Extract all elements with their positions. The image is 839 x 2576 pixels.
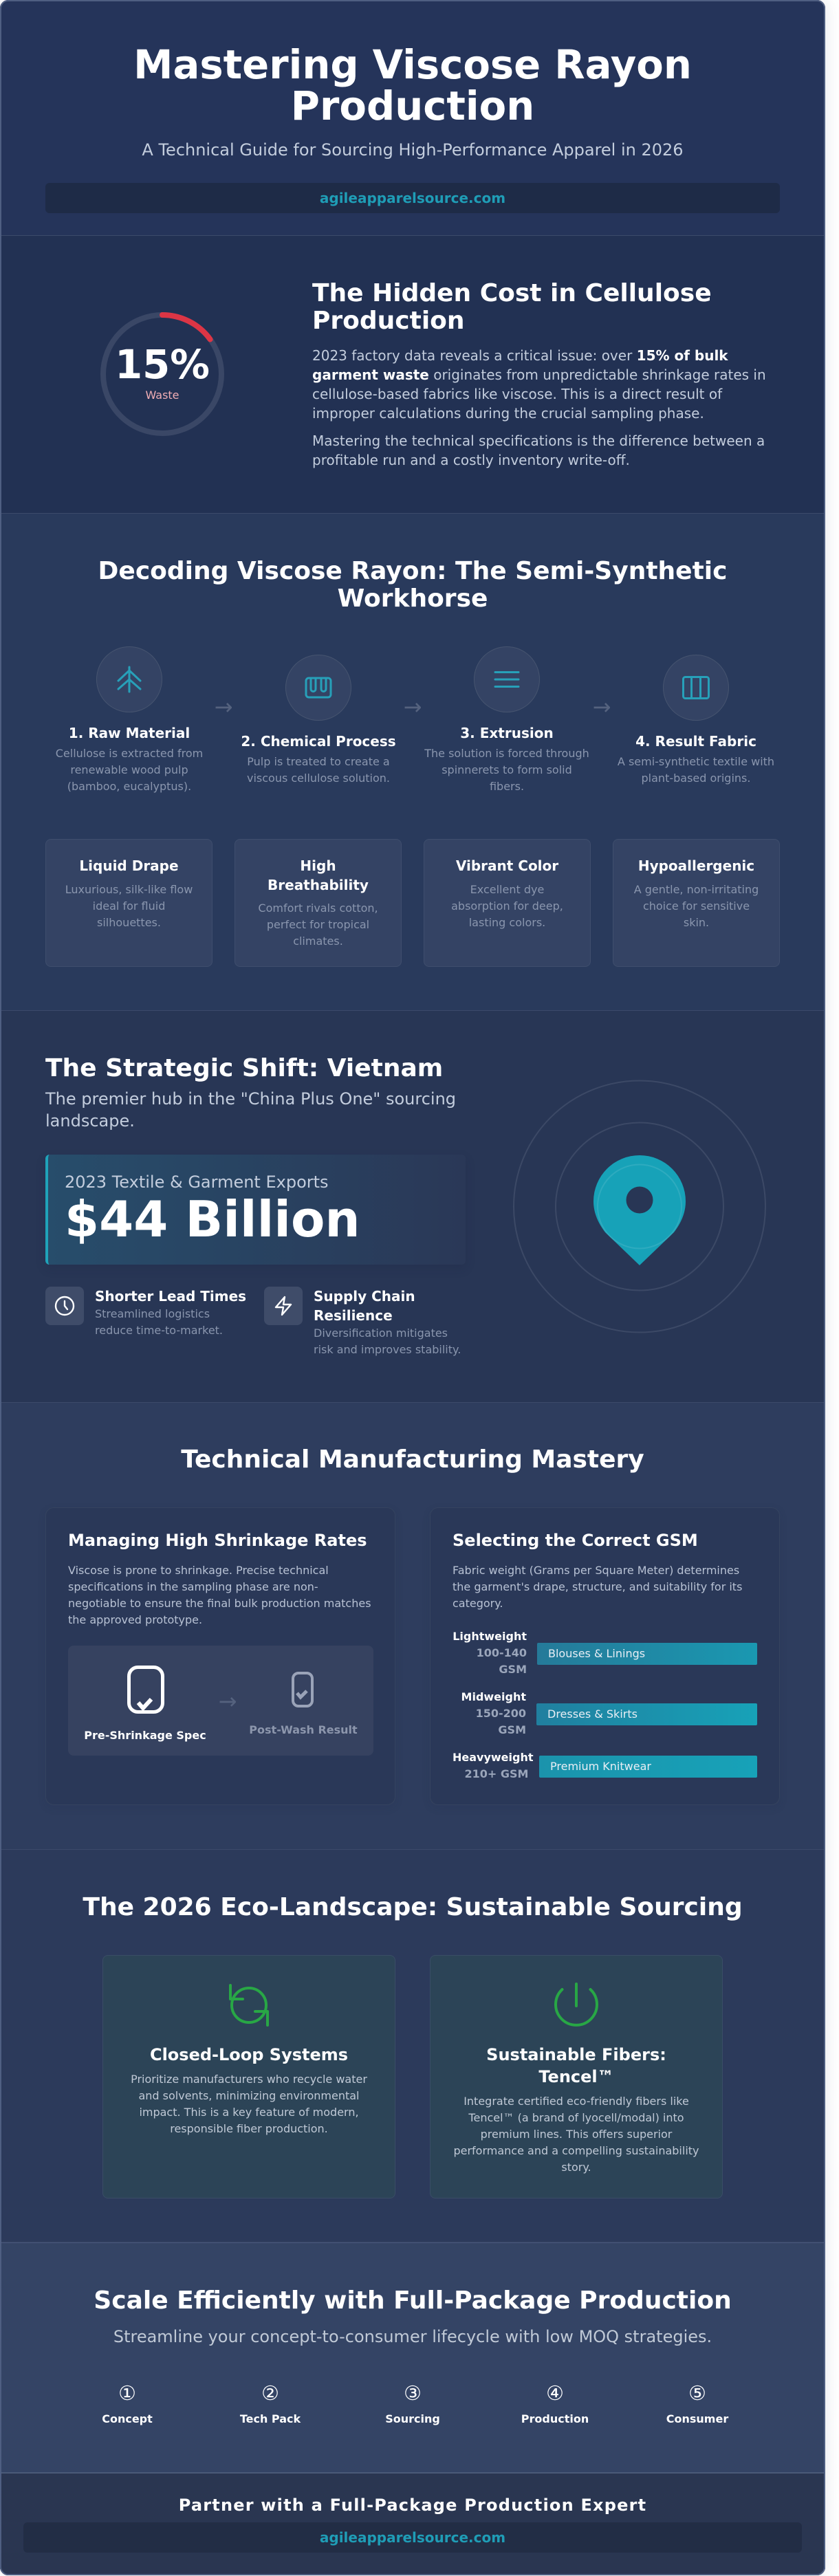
GSM label: lightweight: [453, 1630, 527, 1676]
card text: responsible fiber production.: [170, 2122, 328, 2135]
section: decoding viscose: [0, 514, 825, 1011]
benefit text: [314, 1327, 461, 1356]
step label: Sourcing: [385, 2412, 440, 2425]
feature text: Comfort rivals cotton,: [258, 902, 378, 915]
feature text: perfect for tropical: [267, 918, 369, 931]
heading: [98, 557, 727, 613]
body paragraph 1: [312, 347, 766, 422]
feature text: [451, 883, 563, 929]
benefit text: risk and improves stability.: [314, 1343, 461, 1356]
card title: [486, 2045, 666, 2086]
step 4 icon: fabric: [663, 655, 729, 721]
feature text: [258, 902, 378, 948]
step 1 icon: tree: [96, 646, 162, 712]
body paragraph 2: Mastering the technical specifications is the difference between a: [312, 433, 765, 449]
panel text: category.: [453, 1597, 503, 1610]
section: hidden cost: [0, 236, 825, 514]
benefit title: Shorter Lead Times: [95, 1288, 246, 1305]
step label: Tech Pack: [240, 2412, 301, 2425]
feature title: High: [300, 858, 336, 874]
donut chart: 15% waste: [100, 312, 224, 436]
heading: The 2026 Eco-Landscape: Sustainable Sourcing: [83, 1893, 743, 1921]
step: concept: ①: [118, 2381, 136, 2405]
stat label: waste: Waste: [145, 389, 179, 402]
card text: story.: [561, 2161, 591, 2174]
subheading: landscape.: [45, 1111, 135, 1131]
step 1 text: Cellulose is extracted from: [56, 747, 203, 760]
subheading: Streamline your concept-to-consumer lifecycle with low MOQ strategies.: [113, 2327, 712, 2346]
benefit title: [314, 1288, 415, 1324]
benefit title: Supply Chain: [314, 1288, 415, 1305]
step 2 title: 2. Chemical Process: [241, 733, 396, 750]
panel: shrinkage: [45, 1507, 395, 1805]
step 3 text: The solution is forced through: [424, 747, 589, 760]
subheading: The premier hub in the "China Plus One" sourcing: [45, 1089, 456, 1109]
feature card: vibrant color: [424, 839, 591, 967]
heading: The Hidden Cost in Cellulose: [312, 279, 712, 307]
body paragraph 1: garment waste originates from unpredictable shrinkage rates in: [312, 367, 766, 383]
website bar: [45, 183, 780, 213]
panel text: specifications in the sampling phase are non-: [68, 1580, 318, 1593]
panel text: the approved prototype.: [68, 1613, 202, 1626]
body paragraph 1: 2023 factory data reveals a critical issue: over 15% of bulk: [312, 347, 728, 364]
icon: clock: [45, 1287, 84, 1325]
feature card: liquid drape: [45, 839, 213, 967]
step label: Concept: [102, 2412, 153, 2425]
feature title: Hypoallergenic: [638, 858, 754, 874]
panel title: Selecting the Correct GSM: [453, 1531, 698, 1550]
GSM bar: lightweight: [537, 1643, 757, 1665]
panel: GSM: [430, 1507, 780, 1805]
step: sourcing: ③: [404, 2381, 422, 2405]
stat box: exports: [45, 1155, 466, 1265]
step: consumer: ⑤: [688, 2381, 706, 2405]
card text: Prioritize manufacturers who recycle water: [131, 2073, 367, 2086]
GSM label: midweight: Midweight: [461, 1690, 526, 1703]
feature text: ideal for fluid: [93, 899, 165, 913]
stat value: $44 Billion: [65, 1190, 360, 1248]
step 2 icon: vat: [285, 655, 351, 721]
feature text: Excellent dye: [470, 883, 544, 896]
section: eco landscape: [0, 1850, 825, 2242]
step 3 icon: lines: [474, 646, 540, 712]
heading: Production: [312, 307, 465, 335]
step 3 text: fibers.: [490, 780, 524, 793]
card text: Tencel™ (a brand of lyocell/modal) into: [468, 2111, 684, 2124]
heading: Decoding Viscose Rayon: The Semi-Synthetic: [98, 557, 727, 585]
feature text: skin.: [684, 916, 709, 929]
feature text: lasting colors.: [469, 916, 545, 929]
step 1 text: [56, 747, 203, 793]
website bar: [23, 2522, 802, 2553]
step: production: ④: [546, 2381, 564, 2405]
feature text: Luxurious, silk-like flow: [65, 883, 193, 896]
panel text: negotiable to ensure the final bulk production matches: [68, 1597, 371, 1610]
body paragraph 2: [312, 433, 765, 468]
heading: Scale Efficiently with Full-Package Production: [94, 2286, 732, 2315]
step 4 text: A semi-synthetic textile with: [618, 755, 774, 768]
GSM bar: midweight: Dresses & Skirts: [547, 1707, 638, 1721]
arrow 3: →: [593, 694, 611, 720]
step 3 title: 3. Extrusion: [460, 725, 554, 741]
feature text: climates.: [293, 935, 343, 948]
body paragraph 1: cellulose-based fabrics like viscose. This is a direct result of: [312, 386, 722, 402]
GSM bar: heavyweight: [539, 1756, 757, 1778]
feature text: [634, 883, 759, 929]
panel text: Viscose is prone to shrinkage. Precise technical: [68, 1564, 329, 1577]
feature title: Breathability: [268, 877, 369, 893]
benefit text: Diversification mitigates: [314, 1327, 448, 1340]
feature text: A gentle, non-irritating: [634, 883, 759, 896]
icon: power: [554, 1983, 598, 2027]
section: full package: [0, 2242, 825, 2472]
icon: post-wash garment: [292, 1672, 314, 1707]
card text: premium lines. This offers superior: [481, 2128, 672, 2141]
arrow 1: →: [215, 694, 232, 720]
card text: [453, 2095, 699, 2174]
benefit text: Streamlined logistics: [95, 1307, 210, 1320]
feature text: absorption for deep,: [451, 899, 563, 913]
GSM label: lightweight: GSM: [499, 1663, 527, 1676]
heading: The Strategic Shift: Vietnam: [45, 1054, 443, 1082]
feature text: silhouettes.: [97, 916, 161, 929]
step label: Production: [521, 2412, 589, 2425]
feature card: breathability: [235, 839, 402, 967]
feature card: hypoallergenic: [613, 839, 780, 967]
icon: bolt: [264, 1287, 303, 1325]
heading: [312, 279, 712, 335]
benefit text: reduce time-to-market.: [95, 1324, 223, 1337]
body paragraph 2: profitable run and a costly inventory write-off.: [312, 452, 630, 468]
GSM label: heavyweight: [453, 1751, 534, 1780]
card title: Closed-Loop Systems: [150, 2045, 348, 2064]
subheading: [45, 1089, 456, 1131]
panel text: Fabric weight (Grams per Square Meter) determines: [453, 1564, 739, 1577]
pre-shrinkage label: Pre-Shrinkage Spec: [84, 1729, 206, 1742]
benefit text: [95, 1307, 223, 1337]
GSM label: heavyweight: 210+ GSM: [464, 1767, 528, 1780]
feature text: choice for sensitive: [643, 899, 750, 913]
map graphic: rings and pin: [513, 1080, 766, 1333]
GSM bar: lightweight: Blouses & Linings: [548, 1647, 645, 1660]
website bar: agileapparelsource.com: [320, 190, 505, 206]
icon: pre-shrinkage garment: [127, 1666, 164, 1714]
title: Production: [291, 83, 534, 129]
GSM label: midweight: GSM: [498, 1723, 526, 1736]
GSM label: midweight: [461, 1690, 526, 1736]
card text: and solvents, minimizing environmental: [138, 2089, 359, 2102]
card text: [131, 2073, 367, 2135]
step 3 text: [424, 747, 589, 793]
title: [133, 42, 692, 129]
card text: performance and a compelling sustainability: [453, 2144, 699, 2157]
step 4 title: 4. Result Fabric: [635, 733, 756, 750]
footer: [0, 2472, 825, 2575]
step 2 text: Pulp is treated to create a: [247, 755, 390, 768]
benefit title: Resilience: [314, 1307, 393, 1324]
step 2 text: [247, 755, 390, 785]
section: technical mastery: [0, 1403, 825, 1850]
card title: Sustainable Fibers:: [486, 2045, 666, 2064]
eco card: closed loop: [102, 1955, 395, 2198]
GSM label: lightweight: Lightweight: [453, 1630, 527, 1643]
feature text: [65, 883, 193, 929]
GSM bar: midweight: [536, 1703, 757, 1725]
heading: Technical Manufacturing Mastery: [181, 1445, 644, 1474]
icon: recycle: [229, 1984, 269, 2027]
subtitle: A Technical Guide for Sourcing High-Performance Apparel in 2026: [142, 140, 684, 160]
feature title: Liquid Drape: [79, 858, 179, 874]
step 4 text: [618, 755, 774, 785]
footer call to action: Partner with a Full-Package Production Expert: [179, 2496, 646, 2515]
post-wash label: Post-Wash Result: [249, 1723, 358, 1736]
card title: Tencel™: [538, 2067, 614, 2086]
feature title: [268, 858, 369, 893]
step 3 text: spinnerets to form solid: [442, 763, 572, 776]
title: Mastering Viscose Rayon: [133, 42, 692, 88]
body paragraph 1: improper calculations during the crucial sampling phase.: [312, 405, 704, 422]
card text: impact. This is a key feature of modern,: [139, 2106, 359, 2119]
panel title: Managing High Shrinkage Rates: [68, 1531, 367, 1550]
section: vietnam: [0, 1011, 825, 1403]
arrow: →: [219, 1688, 237, 1714]
step 1 text: (bamboo, eucalyptus).: [67, 780, 191, 793]
step 1 text: renewable wood pulp: [70, 763, 188, 776]
stat: 15%: 15%: [115, 342, 210, 388]
GSM bar: heavyweight: Premium Knitwear: [550, 1760, 651, 1773]
GSM label: midweight: 150-200: [476, 1707, 526, 1720]
GSM label: heavyweight: Heavyweight: [453, 1751, 534, 1764]
eco card: tencel: [430, 1955, 723, 2198]
section: header: [0, 0, 825, 236]
step 4 text: plant-based origins.: [642, 772, 750, 785]
website bar: agileapparelsource.com: [320, 2529, 505, 2546]
step 1 title: 1. Raw Material: [69, 725, 190, 741]
card text: Integrate certified eco-friendly fibers like: [464, 2095, 689, 2108]
GSM label: lightweight: 100-140: [477, 1646, 527, 1659]
shrinkage diagram: [68, 1646, 373, 1756]
arrow 2: →: [404, 694, 422, 720]
heading: Workhorse: [338, 585, 488, 613]
step 2 text: viscous cellulose solution.: [247, 772, 390, 785]
panel text: [453, 1564, 742, 1610]
panel text: [68, 1564, 371, 1626]
step: tech pack: ②: [261, 2381, 279, 2405]
feature title: Vibrant Color: [456, 858, 558, 874]
panel text: the garment's drape, structure, and suitability for its: [453, 1580, 742, 1593]
step label: Consumer: [666, 2412, 728, 2425]
stat label: 2023 Textile & Garment Exports: [65, 1172, 329, 1192]
